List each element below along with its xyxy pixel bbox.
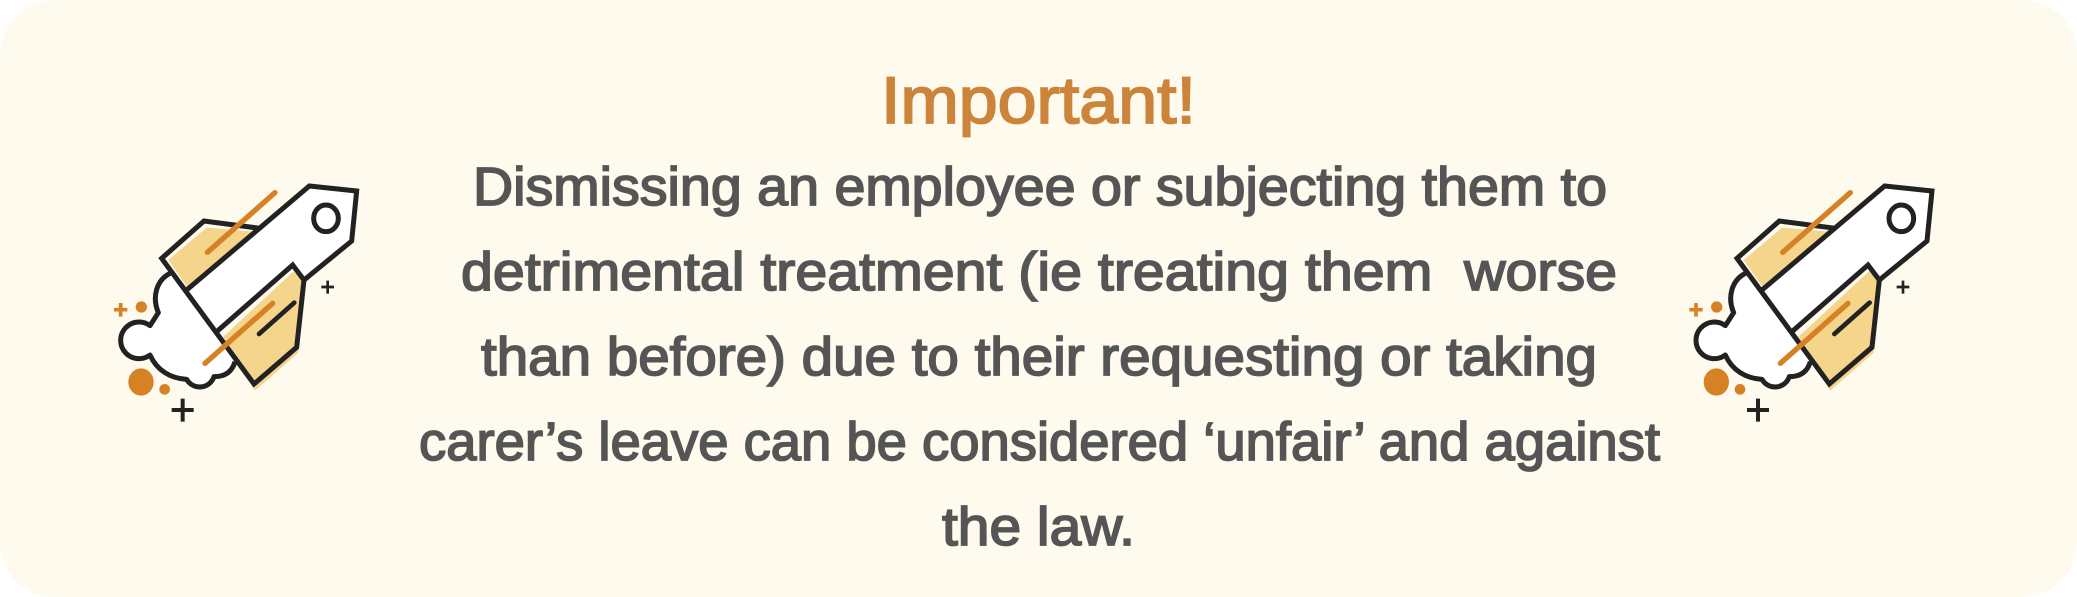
text block: warning message: detrimental treatment (ie treating them worse xyxy=(461,242,1617,302)
icon: right rocket xyxy=(1689,186,1932,422)
title: Important! xyxy=(881,63,1196,137)
icon: left rocket xyxy=(114,186,357,422)
text block: warning message: the law. xyxy=(942,497,1135,557)
text block: warning message: than before) due to their requesting or taking xyxy=(481,327,1597,387)
text block: warning message xyxy=(419,157,1660,557)
text block: warning message: carer’s leave can be considered ‘unfair’ and against xyxy=(419,412,1660,472)
text block: warning message: Dismissing an employee or subjecting them to xyxy=(473,157,1607,217)
